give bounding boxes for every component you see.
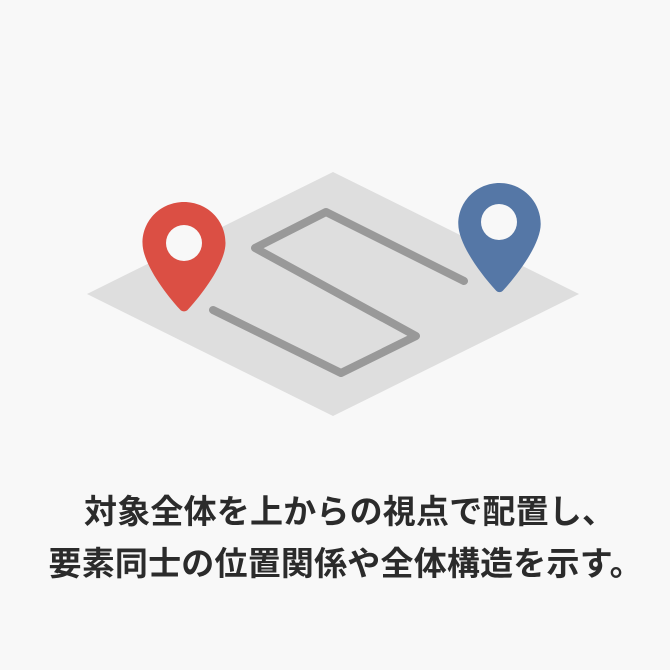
caption line 1: 対象全体を上からの視点で配置し、 [84, 493, 615, 530]
caption line 2: 要素同士の位置関係や全体構造を示す。 [48, 545, 643, 582]
icon: blue location pin [458, 183, 541, 292]
map plane [87, 172, 579, 416]
route line [213, 212, 464, 373]
icon: red location pin [142, 202, 226, 311]
